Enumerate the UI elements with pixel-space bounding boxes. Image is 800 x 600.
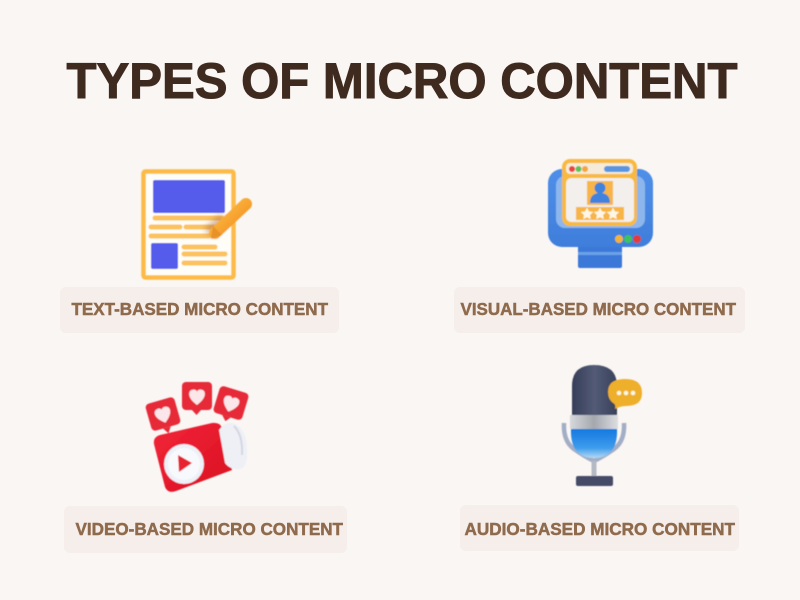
icon: microphone with chat bubble	[564, 365, 642, 486]
title: TYPES OF MICRO CONTENT	[66, 53, 738, 109]
icon: heart badge right	[211, 385, 249, 426]
icon: heart badge left	[145, 396, 183, 437]
icon: heart badge middle	[182, 382, 212, 415]
label: video-based: VIDEO-BASED MICRO CONTENT	[76, 519, 343, 539]
label: text-based: TEXT-BASED MICRO CONTENT	[72, 299, 328, 319]
icon: document with pencil	[144, 172, 246, 278]
icon: monitor with profile card	[548, 159, 653, 268]
icon: video camera with hearts	[145, 382, 249, 492]
label: audio-based: AUDIO-BASED MICRO CONTENT	[464, 519, 735, 539]
label: visual-based	[454, 287, 745, 333]
label: audio-based	[460, 505, 739, 551]
label: visual-based: VISUAL-BASED MICRO CONTENT	[460, 299, 736, 319]
label: text-based	[60, 287, 339, 333]
label: video-based	[64, 506, 347, 553]
